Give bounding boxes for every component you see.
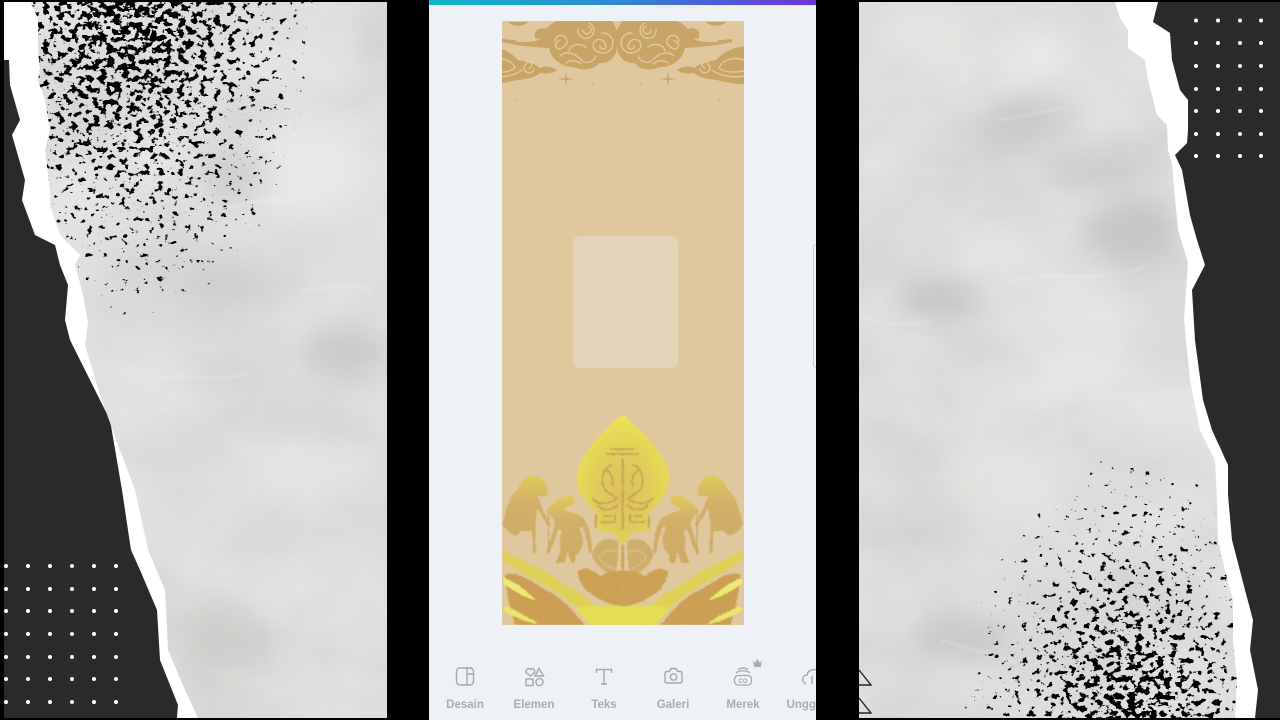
tool: Desain: Desain (446, 699, 484, 711)
dark background right (1100, 2, 1280, 718)
panel: right torn paper (859, 2, 1280, 718)
tool: Teks: Teks (591, 699, 617, 711)
ornament: wayang and gunungan (503, 414, 742, 625)
white torn edge right (1100, 2, 1258, 718)
icon: triangle outlines (859, 670, 871, 713)
black gutters (387, 0, 859, 720)
gunungan stem (622, 540, 624, 580)
panel: left torn paper (4, 2, 390, 718)
gunungan leaf (577, 414, 669, 545)
tool: Galeri (657, 668, 689, 711)
tool: Merek: Merek (726, 699, 760, 711)
toolbar (446, 659, 829, 711)
tool: Elemen: Elemen (514, 699, 554, 711)
dot grid top right (1194, 18, 1263, 158)
dot grid bottom left (4, 564, 118, 704)
tool: Elemen (514, 668, 554, 711)
tool: Galeri: Galeri (657, 699, 689, 711)
dark background left (4, 2, 387, 718)
placeholder rounded panel (573, 236, 678, 368)
gradient top bar (429, 0, 816, 5)
design card (488, 19, 746, 625)
speckle texture bottom right (964, 461, 1237, 718)
speckle texture top left (32, 2, 313, 315)
ornament: top clouds (488, 19, 746, 101)
paper sheet left (4, 2, 390, 718)
gunungan maze pattern (592, 449, 653, 530)
tool: Unggah (clipped) (787, 668, 816, 710)
tool: Unggah (clipped): Unggah (787, 699, 829, 711)
tool: Merek: CO (738, 679, 748, 685)
tool: Desain (446, 668, 484, 711)
white torn edge left (4, 2, 300, 718)
side handle (813, 244, 816, 368)
panel: phone editor screen (429, 0, 829, 720)
tool: Teks (591, 670, 617, 711)
tool: Merek (726, 659, 762, 711)
paper sheet right (859, 2, 1259, 718)
